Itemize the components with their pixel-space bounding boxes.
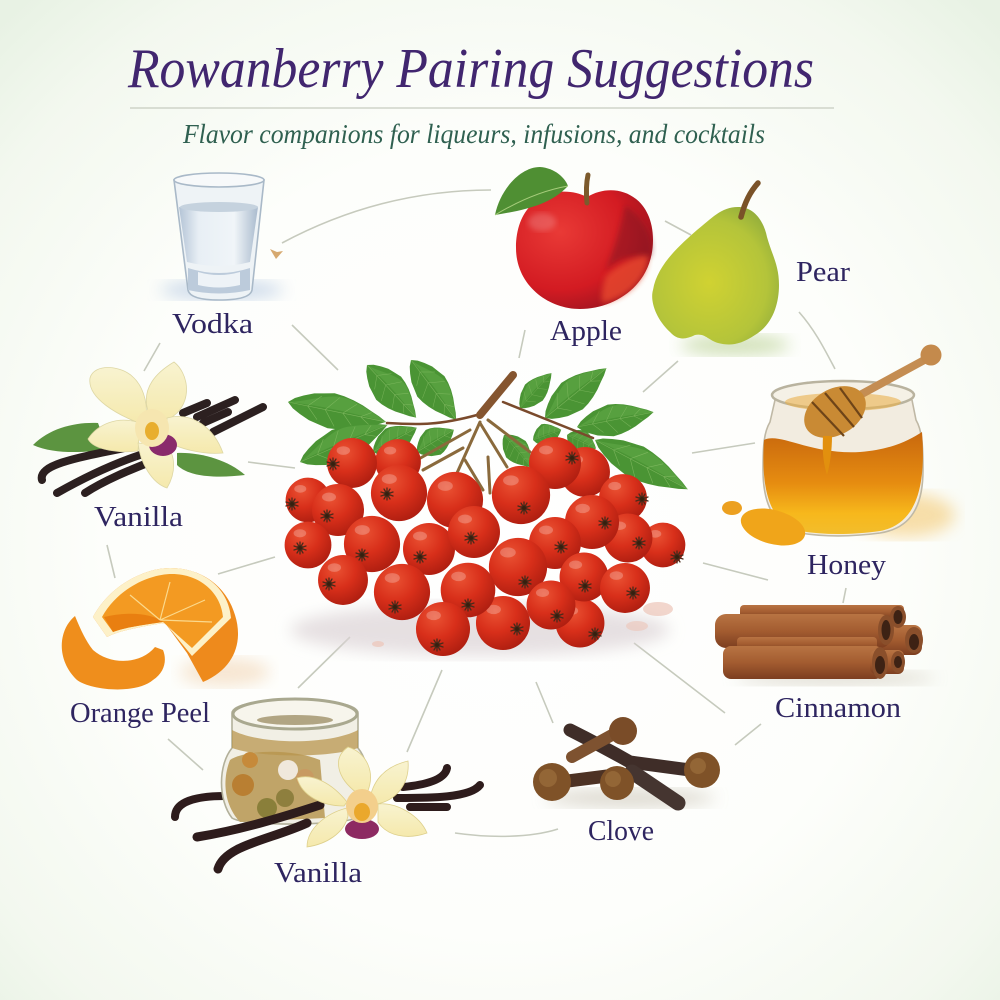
label: Pear: Pear (796, 256, 850, 288)
stains (643, 602, 673, 616)
icon: orange peel (62, 568, 270, 689)
title: Rowanberry Pairing Suggestions (127, 38, 814, 100)
label: Vodka: Vodka (172, 308, 253, 340)
connector marker (270, 249, 283, 259)
label: Vanilla left: Vanilla (94, 501, 183, 533)
icon: apple (495, 167, 653, 309)
icon: vodka glass (160, 173, 284, 300)
label: Vanilla bottom: Vanilla (274, 857, 362, 889)
icon: vanilla with jar (175, 699, 480, 869)
label: Honey: Honey (807, 549, 886, 581)
leaves (284, 350, 696, 504)
label: Apple: Apple (550, 315, 622, 347)
icon: vanilla flower and pods (33, 362, 263, 493)
icon: pear (652, 183, 790, 355)
icon: cloves (533, 717, 720, 807)
connector lines (107, 190, 846, 836)
icon: rowanberry cluster (284, 350, 696, 656)
label: Cinnamon: Cinnamon (775, 692, 902, 724)
label: Orange Peel: Orange Peel (70, 697, 210, 729)
berries (285, 437, 685, 656)
berry calyxes (286, 452, 683, 651)
flower (297, 747, 427, 847)
subtitle: Flavor companions for liqueurs, infusions, and cocktails (182, 119, 765, 149)
icon: cinnamon sticks (715, 605, 935, 685)
label: Clove: Clove (588, 815, 654, 847)
honey puddle (737, 502, 809, 552)
flower (88, 362, 223, 488)
branch (387, 402, 593, 438)
icon: honey jar (722, 344, 955, 552)
